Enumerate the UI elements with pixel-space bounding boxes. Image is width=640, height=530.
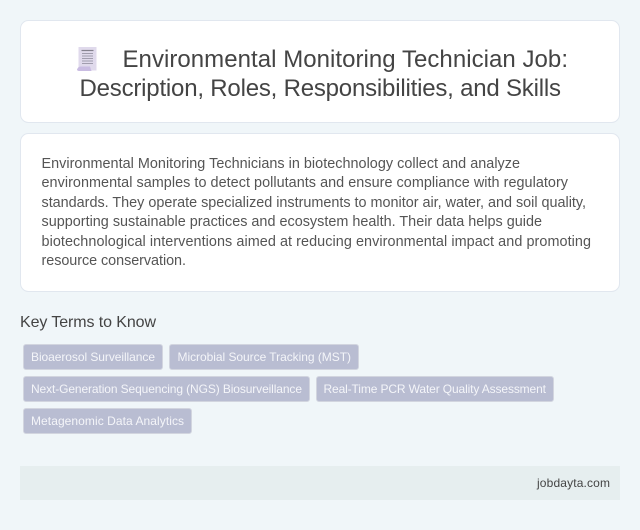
title: Description, Roles, Responsibilities, and Skills (80, 75, 561, 102)
text block: description: environmental samples to detect pollutants and ensure compliance with regulatory (42, 175, 569, 191)
text block: description: Environmental Monitoring Technicians in biotechnology collect and analyze (42, 156, 520, 172)
text block: description: biotechnological interventions aimed at reducing environmental impact and promoting (42, 234, 591, 250)
tag: real-time pcr: Real-Time PCR Water Quality Assessment (324, 382, 547, 396)
text block: description (42, 156, 591, 269)
text block: description: supporting sustainable practices and ecosystem health. Their data helps guide (42, 214, 542, 230)
text block: description: resource conservation. (42, 253, 186, 269)
icon: document scroll (77, 47, 96, 71)
title: Environmental Monitoring Technician Job: (122, 46, 568, 73)
footer: jobdayta.com (536, 476, 610, 490)
tag: bioaerosol surveillance (24, 344, 162, 370)
tag: microbial source tracking (170, 344, 358, 370)
tag: next-generation sequencing (24, 376, 310, 402)
panel: description card (20, 134, 620, 292)
tag: real-time pcr (316, 376, 554, 402)
tag: next-generation sequencing: Next-Generation Sequencing (NGS) Biosurveillance (31, 382, 302, 396)
tag: metagenomic data analytics: Metagenomic Data Analytics (31, 414, 184, 428)
footer (20, 466, 620, 500)
tags: key terms (24, 344, 554, 434)
title (80, 46, 568, 102)
tag: bioaerosol surveillance: Bioaerosol Surveillance (31, 350, 155, 364)
panel: title card (20, 20, 620, 122)
heading: key terms: Key Terms to Know (20, 314, 156, 331)
tag: metagenomic data analytics (24, 408, 192, 434)
tag: microbial source tracking: Microbial Source Tracking (MST) (178, 350, 351, 364)
text block: description: standards. They operate specialized instruments to monitor air, water, and soil quality, (42, 195, 586, 211)
